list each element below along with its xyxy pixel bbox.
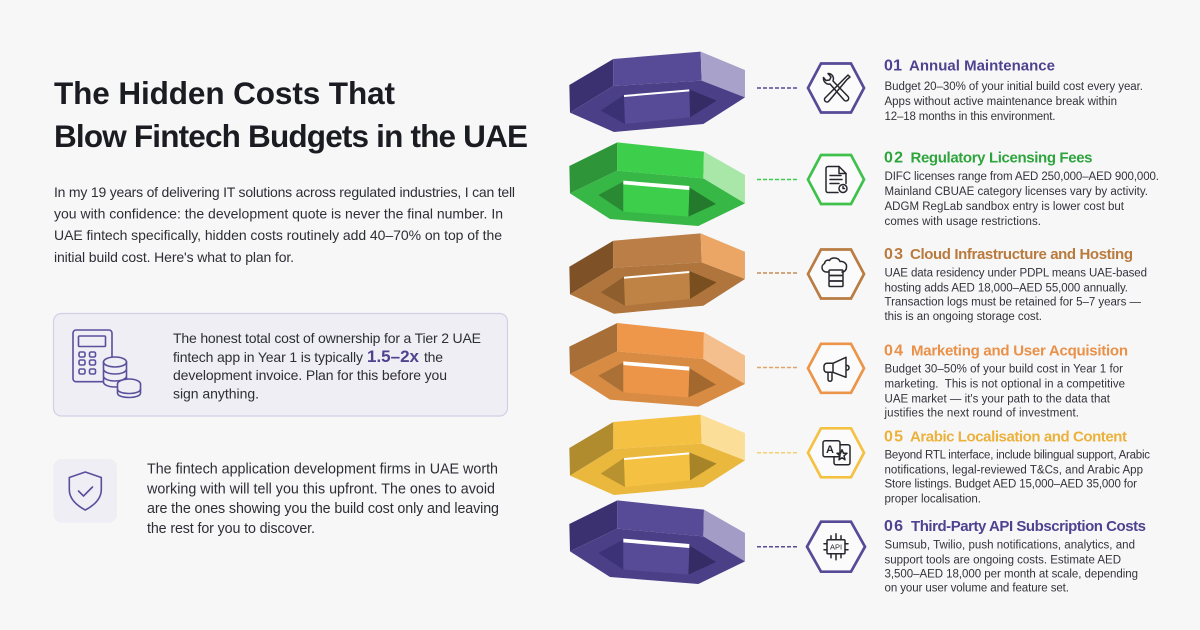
title [54,75,528,154]
item text: justifies the next round of investment. [884,408,1079,420]
item text: Sumsub, Twilio, push notifications, analytics, and [884,539,1135,551]
panel: 01 Annual Maintenance [569,52,1143,132]
shield note text: working with will tell you this upfront. The ones to avoid [146,482,495,498]
item text: proper localisation. [884,493,981,505]
panel: 06 Third-Party API Subscription Costs [569,500,1146,595]
item text: UAE data residency under PDPL means UAE-based [884,268,1147,280]
item text: marketing. This is not optional in a competitive [884,379,1125,391]
title: The Hidden Costs That [54,75,396,111]
callout text [173,330,481,402]
item text [884,343,1128,420]
item text: 03 [884,246,903,263]
item text: hosting adds AED 18,000–AED 55,000 annually. [884,282,1128,294]
item text: this is an ongoing storage cost. [884,311,1042,323]
item text: UAE market — it's your path to the data that [884,394,1111,406]
item text: 04 [884,343,903,360]
icon: translate hexagon [808,428,864,477]
intro paragraph: In my 19 years of delivering IT solutions across regulated industries, I can tell [54,184,515,200]
item text: Regulatory Licensing Fees [910,149,1092,166]
intro paragraph: initial build cost. Here's what to plan for. [54,249,294,265]
icon: shield check [54,459,117,522]
item text: on your user volume and feature set. [884,583,1069,595]
3D hexagon: orange [569,323,745,407]
item text: notifications, legal-reviewed T&Cs, and Arabic App [884,464,1143,476]
callout text: fintech app in Year 1 is typically [173,349,363,365]
intro paragraph: you with confidence: the development quote is never the final number. In [54,206,503,222]
item text: 05 [884,429,903,446]
item text: 01 [884,58,902,75]
panel: 05 Arabic Localisation and Content [569,415,1150,505]
shield note text: are the ones showing you the build cost only and leaving [147,501,499,517]
3D hexagon: yellow [569,415,745,495]
callout text: sign anything. [173,386,259,402]
item text: Budget 20–30% of your initial build cost every year. [884,81,1143,93]
panel: total cost callout [54,314,508,416]
item text: Arabic Localisation and Content [910,429,1127,446]
3D hexagon: green [569,142,745,226]
item text: Annual Maintenance [909,58,1055,75]
connector [757,87,797,89]
item text: 12–18 months in this environment. [884,111,1056,123]
intro paragraph [54,184,515,265]
panel: 03 Cloud Infrastructure and Hosting [569,233,1147,323]
shield note text: The fintech application development firms in UAE worth [147,462,498,478]
callout text: 1.5–2x [367,347,420,366]
item text: ADGM RegLab sandbox entry is lower cost but [884,201,1125,213]
connector [757,272,797,274]
connector [757,366,797,368]
item text: comes with usage restrictions. [884,216,1041,228]
icon: document hexagon [808,155,864,204]
icon: megaphone hexagon [808,344,864,393]
icon: tools hexagon [808,64,864,112]
item text: Store listings. Budget AED 15,000–AED 35,000 for [884,479,1137,491]
title: Blow Fintech Budgets in the UAE [54,118,528,154]
icon: cloud server hexagon [808,250,864,298]
callout text: The honest total cost of ownership for a Tier 2 UAE [173,330,481,346]
item text [884,246,1147,323]
item text: Third-Party API Subscription Costs [911,518,1146,535]
item text [884,58,1143,123]
item text: Cloud Infrastructure and Hosting [910,246,1133,263]
connector [757,178,797,180]
item text: Mainland CBUAE category licenses vary by activity. [884,186,1148,198]
intro paragraph: UAE fintech specifically, hidden costs routinely add 40–70% on top of the [54,227,502,243]
item text: DIFC licenses range from AED 250,000–AED 900,000. [884,171,1159,183]
connector [757,452,797,454]
shield note text [146,462,499,537]
shield note text: the rest for you to discover. [147,521,315,537]
item text: Marketing and User Acquisition [911,343,1128,360]
item text: Budget 30–50% of your build cost in Year 1 for [884,364,1123,376]
icon: API chip hexagon [807,522,865,572]
3D hexagon: brown [569,233,745,314]
item text: 06 [884,518,903,535]
callout text: development invoice. Plan for this before you [173,367,447,383]
panel: 02 Regulatory Licensing Fees [569,142,1159,228]
icon: API chip hexagon: API [830,543,842,552]
panel: shield note [54,459,499,537]
item text: 02 [884,149,903,166]
item text [884,518,1146,595]
3D hexagon: dark purple [569,500,745,584]
item text [884,429,1150,505]
panel: 04 Marketing and User Acquisition [569,323,1128,420]
item text: support tools are ongoing costs. Estimate AED [884,554,1121,566]
3D hexagon: purple [569,52,745,132]
item text: Beyond RTL interface, include bilingual support, Arabic [884,449,1150,461]
icon: translate hexagon: A [826,444,834,456]
item text: Transaction logs must be retained for 5–7 years — [884,297,1142,309]
icon: calculator and coins [73,330,140,398]
item text [884,149,1159,228]
item text: Apps without active maintenance break within [884,96,1117,108]
connector [757,546,797,548]
callout text: the [424,349,443,365]
item text: 3,500–AED 18,000 per month at scale, depending [884,569,1138,581]
